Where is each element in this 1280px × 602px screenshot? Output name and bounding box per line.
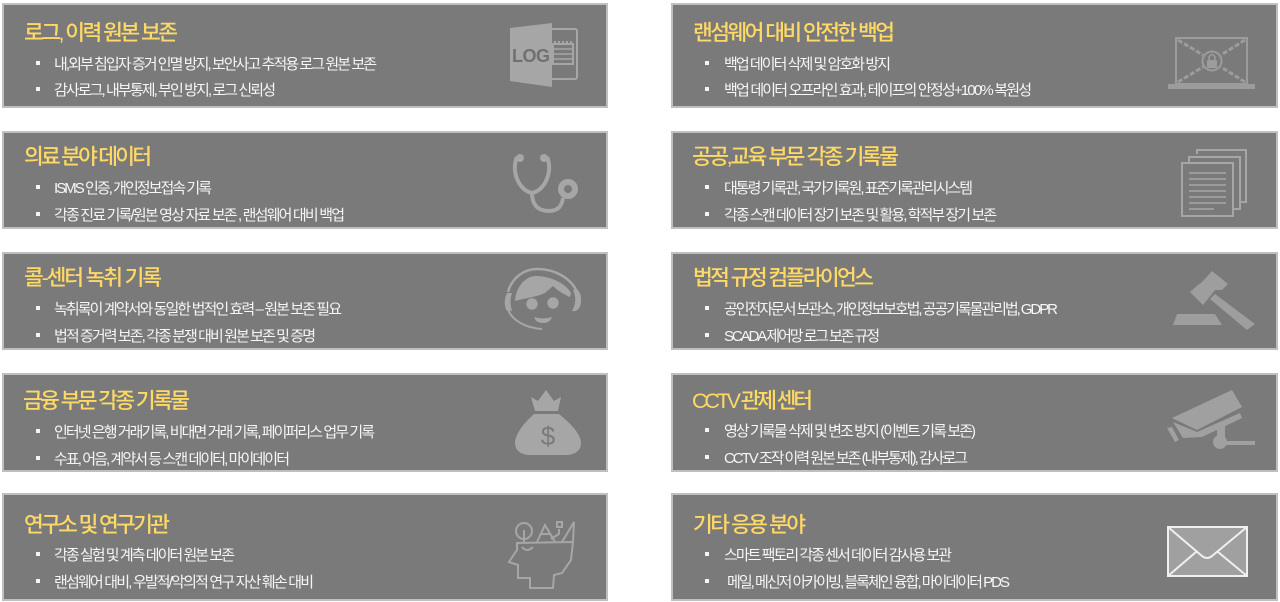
icon: gavel [1173,271,1255,330]
heading: 콜-센터 녹취 기록 [24,266,162,290]
heading: 로그, 이력 원본 보존 [24,21,178,45]
bullet 1: 인터넷 은행 거래기록, 비대면 거래 기록, 페이퍼리스 업무 기록 [54,424,375,441]
panel: call center recordings [3,253,607,349]
heading: 기타 응용 분야 [693,513,806,537]
heading: 공공,교육 부문 각종 기록물 [692,145,899,169]
bullet 2: 메일, 메신저 아카이빙, 블록체인 융합, 마이데이터 PDS [727,574,1010,591]
bullet 1: 공인전자문서 보관소, 개인정보보호법, 공공기록물관리법, GDPR [724,301,1058,318]
bullet 1: 영상 기록물 삭제 및 변조 방지 (이벤트 기록 보존) [724,423,976,440]
panel: other applications [672,494,1277,600]
bullet 2: 각종 진료 기록/원본 영상 자료 보존 , 랜섬웨어 대비 백업 [54,207,345,224]
heading: 연구소 및 연구기관 [24,513,170,537]
bullet 1: 내,외부 침입자 증거 인멸 방지, 보안사고 추적용 로그 원본 보존 [54,56,377,73]
bullet 1: 대통령 기록관, 국가기록원, 표준기록관리시스템 [724,180,973,197]
panel: log and history preservation [3,4,607,107]
icon: log door [510,23,577,87]
icon: log door: LOG [512,46,550,66]
icon: document stack [1182,150,1246,216]
bullet 2: 백업 데이터 오프라인 효과, 테이프의 안정성+100% 복원성 [724,82,1032,99]
icon: money bag: $ [541,421,556,451]
bullet 1: 스마트 팩토리 각종 센서 데이터 감사용 보관 [724,547,952,564]
icon: envelope [1168,527,1247,576]
bullet 1: ISMS 인증, 개인정보접속 기록 [54,180,212,197]
bullet 2: 각종 스캔 데이터 장기 보존 및 활용, 학적부 장기 보존 [724,207,997,224]
bullet 2: 수표, 어음, 계약서 등 스캔 데이터, 마이데이터 [54,451,290,468]
bullet 1: 녹취록이 계약서와 동일한 법적인 효력 – 원본 보존 필요 [54,301,342,318]
bullet 1: 백업 데이터 삭제 및 암호화 방지 [724,56,891,73]
heading: 의료 분야 데이터 [24,145,152,169]
panel: finance records [3,374,607,471]
heading: 금융 부문 각종 기록물 [23,389,190,413]
panel: ransomware-safe backup [672,4,1277,107]
heading: 랜섬웨어 대비 안전한 백업 [693,21,895,45]
bullet 1: 각종 실험 및 계측 데이터 원본 보존 [54,547,235,564]
panel: medical data [3,132,607,228]
panel: CCTV control center [672,374,1277,471]
bullet 2: CCTV 조작 이력 원본 보존 (내부통제), 감사로그 [724,450,968,467]
icon: head with ideas [509,522,574,588]
icon: chained laptop [1168,38,1255,89]
bullet 2: 랜섬웨어 대비, 우발적/악의적 연구 자산 훼손 대비 [54,574,314,591]
panel: legal compliance [672,253,1277,349]
bullet 2: 법적 증거력 보존, 각종 분쟁 대비 원본 보존 및 증명 [54,328,316,345]
bullet 2: SCADA 제어망 로그 보존 규정 [724,328,880,345]
panel: research institutes [3,494,607,600]
icon: headset operator [505,269,581,329]
icon: stethoscope [515,154,575,211]
heading: 법적 규정 컴플라이언스 [693,266,874,290]
bullet 2: 감사로그, 내부통제, 부인 방지, 로그 신뢰성 [54,82,276,99]
heading: CCTV 관제 센터 [692,389,813,413]
icon: CCTV camera [1167,390,1255,449]
panel: public and education records [672,132,1277,228]
icon: money bag [515,390,581,455]
